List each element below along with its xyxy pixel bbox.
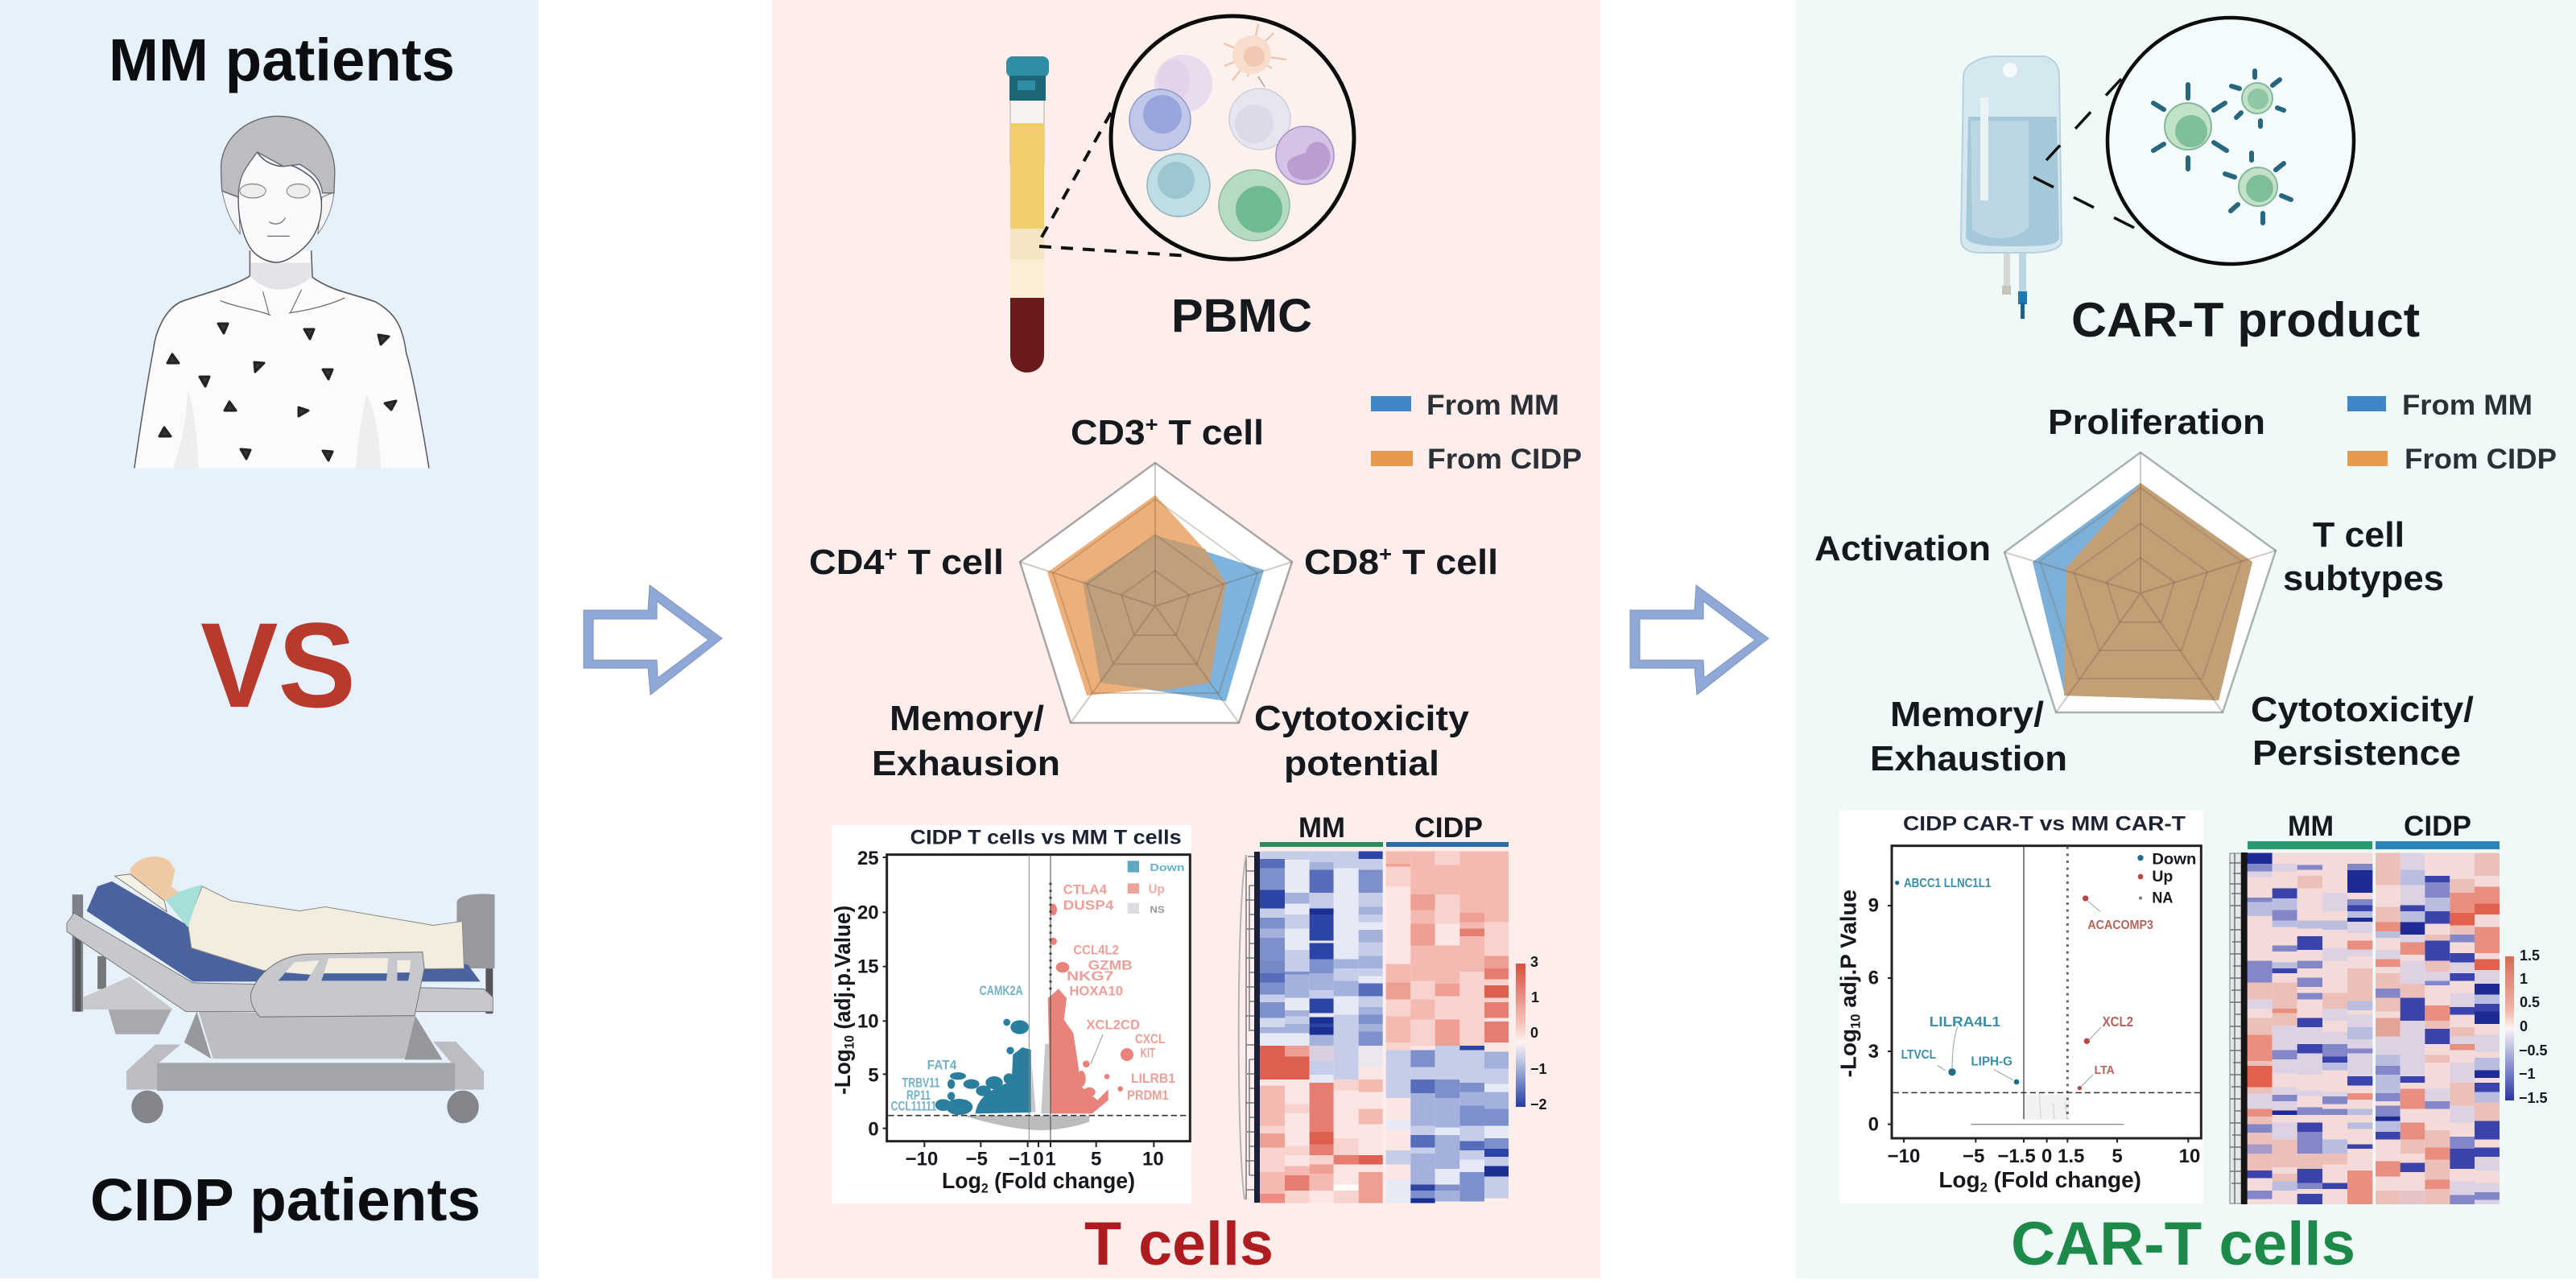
volcano plot: CIDP T cells vs MM T cells: (adj.p.Value) xyxy=(830,906,855,1035)
axis label: Cytotoxicity/Persistence: Persistence xyxy=(2252,733,2461,773)
volcano plot: CIDP CAR-T vs MM CAR-T: −10 xyxy=(1888,1146,1920,1167)
volcano plot: CIDP CAR-T vs MM CAR-T: 0 xyxy=(1868,1114,1879,1136)
volcano plot: CIDP T cells vs MM T cells: KIT xyxy=(1141,1045,1155,1060)
axis label: CD3+ T cell: + xyxy=(1146,412,1158,436)
volcano plot: CIDP T cells vs MM T cells: CCL11111 xyxy=(891,1098,936,1113)
axis label: Memory/Exhaustion xyxy=(1870,695,2067,778)
icon: CAR-T infusion bag xyxy=(1961,56,2062,319)
volcano plot: CIDP CAR-T vs MM CAR-T: LIPH-G xyxy=(1971,1055,2013,1068)
legend: CAR-T radar: From CIDP xyxy=(2405,444,2557,475)
volcano plot: CIDP CAR-T vs MM CAR-T: 2 xyxy=(1980,1179,1988,1195)
colorbar: 1.5 xyxy=(2520,947,2540,964)
panel: CAR-T cells xyxy=(1796,0,2576,1278)
volcano plot: CIDP T cells vs MM T cells: −10 xyxy=(906,1148,938,1170)
volcano plot: CIDP T cells vs MM T cells: PRDM1 xyxy=(1127,1088,1169,1103)
heatmap header: MM and CIDP group bars: MM xyxy=(2288,811,2334,842)
axis label: Cytotoxicity/Persistence: Cytotoxicity/ xyxy=(2251,690,2474,729)
volcano plot: CIDP CAR-T vs MM CAR-T: 3 xyxy=(1868,1041,1879,1063)
dendrogram xyxy=(2230,852,2248,1204)
volcano plot: CIDP CAR-T vs MM CAR-T: Log xyxy=(1938,1167,1980,1192)
volcano plot: CIDP CAR-T vs MM CAR-T: LTVCL xyxy=(1901,1048,1936,1062)
heatmap: CAR-T cells xyxy=(2248,853,2500,1204)
axis label: Cytotoxicity potential: Cytotoxicity xyxy=(1254,699,1470,738)
arrow: T cells to CAR-T cells xyxy=(1629,584,1769,696)
volcano plot: CIDP T cells vs MM T cells: −1 xyxy=(1009,1148,1030,1170)
volcano plot: CIDP CAR-T vs MM CAR-T: 0 xyxy=(2041,1146,2052,1167)
volcano plot: CIDP CAR-T vs MM CAR-T: ABCC1 LLNC1L1 xyxy=(1904,877,1992,890)
axis label: CD3+ T cell: CD3 xyxy=(1071,413,1141,452)
colorbar xyxy=(2505,947,2548,1106)
volcano plot: CIDP CAR-T vs MM CAR-T: CIDP CAR-T vs MM CAR-T xyxy=(1903,813,2186,836)
colorbar xyxy=(1516,954,1547,1113)
volcano plot: CIDP T cells vs MM T cells: 10 xyxy=(842,1035,857,1049)
colorbar: −0.5 xyxy=(2519,1042,2548,1059)
volcano plot: CIDP CAR-T vs MM CAR-T: -Log xyxy=(1836,1029,1861,1077)
colorbar: 1 xyxy=(2520,971,2528,987)
axis label: CD3+ T cell: T cell xyxy=(1158,413,1264,452)
volcano plot: CIDP CAR-T vs MM CAR-T: 10 xyxy=(2179,1146,2200,1167)
volcano plot: CIDP T cells vs MM T cells: CIDP T cells vs MM T cells xyxy=(910,827,1182,848)
callout: CAR-T cell lens with dashed lines xyxy=(2033,18,2354,264)
volcano plot: CIDP T cells vs MM T cells: LILRB1 xyxy=(1131,1071,1175,1086)
dendrogram xyxy=(1239,852,1260,1203)
volcano plot: CIDP CAR-T vs MM CAR-T: Down xyxy=(2152,851,2196,868)
axis label: Memory/Exhaustion: Memory/ xyxy=(1890,695,2044,734)
axis label: Cytotoxicity potential: potential xyxy=(1284,744,1439,783)
colorbar: −1.5 xyxy=(2519,1090,2548,1106)
axis label: Cytotoxicity potential xyxy=(1254,699,1470,783)
icon: blood collection tube xyxy=(1006,56,1049,373)
panel: T cells xyxy=(772,0,1600,1278)
callout: PBMC lens with dashed lines xyxy=(1039,16,1354,259)
volcano plot: CIDP CAR-T vs MM CAR-T: LILRA4L1 xyxy=(1930,1013,2000,1030)
volcano plot: CIDP T cells vs MM T cells: XCL2CD xyxy=(1086,1017,1140,1032)
heatmap header: MM and CIDP group bars: CIDP xyxy=(2404,811,2471,842)
volcano plot: CIDP T cells vs MM T cells: CTLA4 xyxy=(1063,882,1108,898)
icon: hospital bed with CIDP patient xyxy=(67,857,495,1123)
colorbar: 0 xyxy=(1530,1025,1538,1041)
volcano plot: CIDP T cells vs MM T cells: DUSP4 xyxy=(1063,898,1114,913)
volcano plot: CIDP T cells vs MM T cells: RP11 xyxy=(906,1088,931,1103)
axis label: CD8+ T cell: + xyxy=(1379,542,1392,566)
axis label: Memory/Exhausion xyxy=(872,699,1060,783)
axis label: Cytotoxicity/Persistence xyxy=(2251,690,2474,773)
legend: T cell radar: From CIDP xyxy=(1427,444,1582,475)
legend: T cell radar xyxy=(1371,390,1582,475)
label: PBMC: PBMC xyxy=(1171,290,1312,342)
colorbar: 3 xyxy=(1530,954,1538,970)
volcano plot: CIDP CAR-T vs MM CAR-T: −5 xyxy=(1963,1146,1984,1167)
legend: CAR-T radar: From MM xyxy=(2402,390,2533,421)
volcano plot: CIDP CAR-T vs MM CAR-T: XCL2 xyxy=(2103,1013,2133,1030)
axis label: Memory/Exhausion: Exhausion xyxy=(872,744,1060,783)
heading: VS: VS xyxy=(200,597,356,733)
radar chart: T cells xyxy=(1020,463,1292,723)
volcano plot: CIDP CAR-T vs MM CAR-T: LTA xyxy=(2095,1064,2115,1077)
volcano plot: CIDP CAR-T vs MM CAR-T: 1.5 xyxy=(2058,1146,2084,1167)
colorbar: 0 xyxy=(2520,1018,2528,1034)
volcano plot: CIDP CAR-T vs MM CAR-T: Up xyxy=(2152,869,2174,886)
panel: patients xyxy=(0,0,539,1278)
axis label: CD4+ T cell: T cell xyxy=(898,543,1004,582)
volcano plot: CIDP T cells vs MM T cells: 20 xyxy=(857,902,879,923)
volcano plot: CIDP T cells vs MM T cells: −5 xyxy=(966,1148,988,1170)
icon: MM patient with skin lesions xyxy=(134,116,429,469)
axis label: Memory/Exhausion: Memory/ xyxy=(890,699,1044,738)
volcano plot: CIDP T cells vs MM T cells: NKG7 xyxy=(1067,968,1113,984)
volcano plot: CIDP CAR-T vs MM CAR-T: adj.P Value xyxy=(1836,890,1861,1013)
heading: MM patients: MM patients xyxy=(109,27,455,93)
volcano plot: CIDP T cells vs MM T cells: 0 xyxy=(1033,1148,1044,1170)
colorbar: 1 xyxy=(1531,989,1539,1005)
volcano plot: CIDP T cells vs MM T cells: HOXA10 xyxy=(1069,984,1123,999)
volcano plot: CIDP CAR-T vs MM CAR-T xyxy=(1836,811,2203,1203)
axis label: CD4+ T cell: + xyxy=(884,542,898,566)
axis label: Memory/Exhaustion: Exhaustion xyxy=(1870,739,2067,778)
volcano plot: CIDP T cells vs MM T cells: Down xyxy=(1150,861,1185,873)
volcano plot: CIDP CAR-T vs MM CAR-T: 5 xyxy=(2112,1146,2123,1167)
volcano plot: CIDP T cells vs MM T cells: 5 xyxy=(868,1064,879,1086)
volcano plot: CIDP T cells vs MM T cells: 10 xyxy=(857,1011,879,1033)
colorbar: −2 xyxy=(1530,1096,1547,1113)
heatmap: T cells xyxy=(1260,852,1509,1203)
heatmap header: MM and CIDP group bars: MM xyxy=(1298,812,1345,844)
volcano plot: CIDP T cells vs MM T cells: TRBV11 xyxy=(902,1075,939,1091)
label: CAR-T product: CAR-T product xyxy=(2071,293,2420,347)
volcano plot: CIDP T cells vs MM T cells: CXCL xyxy=(1135,1031,1165,1046)
volcano plot: CIDP T cells vs MM T cells: CCL4L2 xyxy=(1073,942,1119,957)
volcano plot: CIDP T cells vs MM T cells: 5 xyxy=(1091,1148,1101,1170)
colorbar: −1 xyxy=(2519,1066,2536,1082)
volcano plot: CIDP T cells vs MM T cells: -Log xyxy=(830,1046,855,1095)
volcano plot: CIDP T cells vs MM T cells: GZMB xyxy=(1088,958,1133,973)
axis label: CD4+ T cell: CD4 xyxy=(809,543,880,582)
title: CAR-T cells: CAR-T cells xyxy=(2011,1210,2355,1278)
axis label: T cell subtypes: T cell xyxy=(2313,515,2405,555)
volcano plot: CIDP CAR-T vs MM CAR-T: 9 xyxy=(1868,895,1879,917)
heading: CIDP patients: CIDP patients xyxy=(90,1166,481,1233)
heatmap header: MM and CIDP group bars: CIDP xyxy=(1414,812,1483,844)
volcano plot: CIDP T cells vs MM T cells: CAMK2A xyxy=(980,983,1023,998)
volcano plot: CIDP CAR-T vs MM CAR-T: NA xyxy=(2152,890,2173,907)
colorbar: 0.5 xyxy=(2520,994,2540,1010)
axis label: T cell subtypes xyxy=(2283,515,2444,598)
heatmap header: MM and CIDP group bars xyxy=(1260,812,1509,847)
volcano plot: CIDP T cells vs MM T cells: 10 xyxy=(1142,1148,1164,1170)
volcano plot: CIDP CAR-T vs MM CAR-T: 10 xyxy=(1847,1013,1863,1029)
arrow: patients to T cells xyxy=(583,584,723,696)
volcano plot: CIDP CAR-T vs MM CAR-T: 6 xyxy=(1868,968,1879,989)
volcano plot: CIDP T cells vs MM T cells: Up xyxy=(1149,882,1165,896)
volcano plot: CIDP T cells vs MM T cells: 15 xyxy=(857,956,879,978)
volcano plot: CIDP CAR-T vs MM CAR-T: ACACOMP3 xyxy=(2087,919,2153,932)
volcano plot: CIDP T cells vs MM T cells xyxy=(830,825,1191,1203)
axis label: Activation: Activation xyxy=(1814,529,1991,568)
heatmap header: MM and CIDP group bars xyxy=(2248,811,2500,849)
title: T cells: T cells xyxy=(1084,1210,1274,1278)
axis label: CD8+ T cell: CD8 xyxy=(1304,543,1375,582)
axis label: CD8+ T cell: T cell xyxy=(1392,543,1498,582)
radar chart: CAR-T cells xyxy=(2004,452,2276,712)
volcano plot: CIDP T cells vs MM T cells: (Fold change) xyxy=(989,1168,1135,1193)
volcano plot: CIDP CAR-T vs MM CAR-T: −1.5 xyxy=(1997,1146,2036,1167)
colorbar: −1 xyxy=(1530,1061,1547,1077)
volcano plot: CIDP CAR-T vs MM CAR-T: (Fold change) xyxy=(1988,1167,2141,1192)
volcano plot: CIDP T cells vs MM T cells: 25 xyxy=(857,848,879,869)
volcano plot: CIDP T cells vs MM T cells: 2 xyxy=(981,1180,989,1195)
volcano plot: CIDP T cells vs MM T cells: Log xyxy=(942,1168,983,1193)
volcano plot: CIDP T cells vs MM T cells: FAT4 xyxy=(927,1057,957,1072)
axis label: Proliferation: Proliferation xyxy=(2048,402,2265,442)
legend: CAR-T radar xyxy=(2347,390,2557,475)
volcano plot: CIDP T cells vs MM T cells: 0 xyxy=(868,1119,879,1141)
legend: T cell radar: From MM xyxy=(1426,390,1559,421)
volcano plot: CIDP T cells vs MM T cells: 1 xyxy=(1045,1148,1056,1170)
volcano plot: CIDP T cells vs MM T cells: NS xyxy=(1150,904,1165,915)
axis label: T cell subtypes: subtypes xyxy=(2283,559,2444,598)
